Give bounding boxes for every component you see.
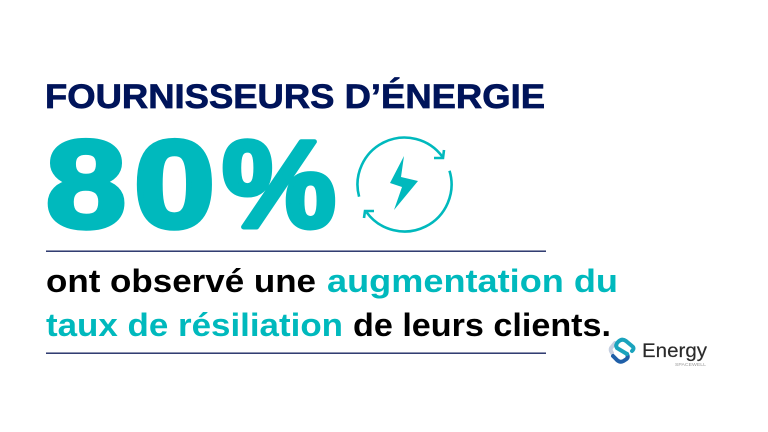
icon: logo mark [611, 340, 634, 362]
icon: lower arrow arc [364, 171, 452, 231]
big statistic: 80% [46, 116, 336, 254]
bottom divider [46, 352, 546, 354]
logo wordmark: Energy [642, 341, 708, 362]
statement line 2 [46, 307, 611, 343]
statement line 1: augmentation du [327, 263, 618, 299]
big statistic: 80%: 0 [134, 116, 215, 254]
logo: Energy Spacewell [611, 340, 708, 367]
big statistic: 80%: 8 [46, 116, 126, 254]
statement line 1 [46, 263, 618, 299]
big statistic: 80%: % [222, 116, 336, 254]
statement line 1: ont observé une [46, 263, 316, 299]
icon: lightning bolt [390, 156, 418, 210]
title: FOURNISSEURS D’ÉNERGIE [45, 76, 545, 116]
icon: upper arrow arc [358, 138, 444, 197]
icon: energy renewal cycle [358, 138, 452, 231]
top divider [46, 250, 546, 252]
logo sub-wordmark: SPACEWELL [675, 362, 707, 367]
statement line 2: de leurs clients. [353, 307, 611, 343]
statement line 2: taux de résiliation [46, 307, 343, 343]
